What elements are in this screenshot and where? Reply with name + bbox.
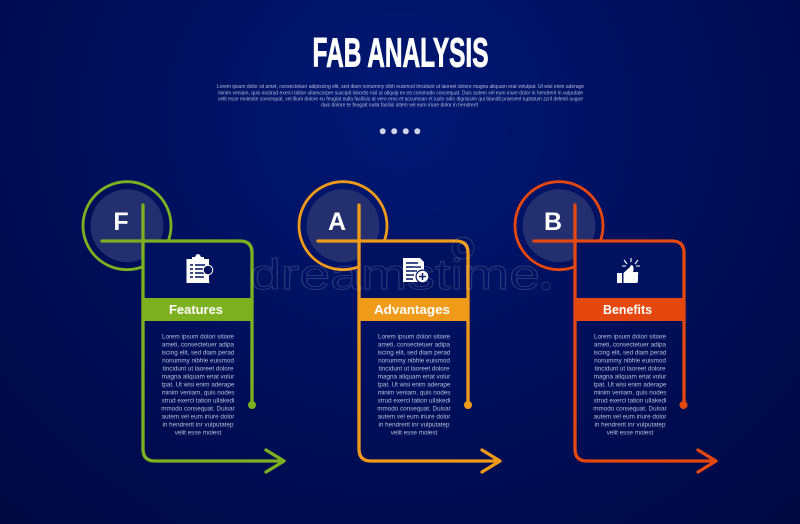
description: advantages: tpat. Ut wisi enim aderape [378, 382, 451, 388]
description: features [161, 334, 235, 436]
letter badge B: B [544, 208, 562, 236]
intro text block: velit esse molestie consequat, vel illum dolore eu feugiat nulla facilisis at vero eros et accumsan et iusto odio dignissim qui blandit praesent luptatum zzril delenit augue [218, 96, 583, 102]
description: features: tpat. Ut wisi enim aderape [162, 382, 235, 388]
description: advantages: iscing elit, sed diam perad [378, 350, 451, 356]
description: features: Lorem ipsum dolori sitiare [162, 334, 235, 340]
description: benefits: ameti, consectetuer adipa [594, 342, 667, 348]
description: benefits: Lorem ipsum dolori sitiare [594, 334, 667, 340]
intro text block [217, 84, 584, 108]
letter badge A [299, 182, 387, 270]
card background [359, 241, 468, 298]
description: advantages: mmodo consequat. Duisar [377, 406, 451, 412]
description: advantages: magna aliquam eriat volur [378, 374, 450, 380]
icon: thumbs up with sparks [617, 258, 640, 283]
description: advantages [377, 334, 451, 436]
green frame arrow [102, 205, 284, 472]
description: advantages: in hendrerit inr vulputatep [378, 422, 450, 428]
description: benefits: tpat. Ut wisi enim aderape [594, 382, 667, 388]
description: benefits: iscing elit, sed diam perad [594, 350, 667, 356]
letter badge F: F [113, 208, 129, 236]
description: advantages: tincidunt ut laoreet dolore [379, 366, 450, 372]
intro text block: Lorem ipsum dolor sit amet, consectetuer adipiscing elit, sed diam nonummy nibh euismod tincidunt ut laoreet dolore magna aliquam erat volutpat. Ut wisi enim aderage [217, 84, 584, 90]
label band: Benefits: Benefits [603, 302, 652, 317]
frame end dot [680, 401, 688, 409]
description: features: iscing elit, sed diam perad [162, 350, 235, 356]
description: features: minim veniam, quis nodes [162, 390, 234, 396]
description: benefits: magna aliquam eriat volur [594, 374, 666, 380]
description: benefits: velit esse molest [607, 430, 654, 436]
card background [575, 241, 684, 298]
letter badge A: A [328, 208, 346, 236]
label band: Advantages: Advantages [374, 302, 450, 317]
description: advantages: autem vel eum iriure dolor [378, 414, 450, 420]
description: features: magna aliquam eriat volur [162, 374, 234, 380]
watermark [250, 237, 550, 299]
description: advantages: minim veniam, quis nodes [378, 390, 450, 396]
description: benefits [593, 334, 667, 436]
description: features: in hendrerit inr vulputatep [162, 422, 234, 428]
watermark: dreamstime [250, 251, 540, 299]
card background [143, 241, 252, 298]
description: advantages: Lorem ipsum dolori sitiare [378, 334, 451, 340]
letter badge F [83, 182, 171, 270]
icon: document with plus [403, 258, 429, 283]
description: benefits: nonummy nibhle euismod [594, 358, 666, 364]
description: features: tincidunt ut laoreet dolore [163, 366, 234, 372]
frame end dot [248, 401, 256, 409]
description: features: ameti, consectetuer adipa [162, 342, 235, 348]
label band: Advantages [359, 298, 468, 321]
description: advantages: nonummy nibhle euismod [378, 358, 450, 364]
title: FAB ANALYSIS [312, 30, 488, 76]
description: advantages: ameti, consectetuer adipa [378, 342, 451, 348]
description: benefits: in hendrerit inr vulputatep [594, 422, 666, 428]
letter badge B [515, 182, 603, 270]
description: benefits: strud exerci tation ullakedi [594, 398, 666, 404]
description: benefits: autem vel eum iriure dolor [594, 414, 666, 420]
orange frame arrow [318, 205, 500, 472]
intro text block: minim veniam, quis nostrud exerci tation ullamcorper suscipit lobortis nisl ut aliquip ex ea commodo consequat. Duis autem vel eum iriure dolor in hendrerit in vulputate [218, 90, 583, 96]
label band: Features: Features [169, 302, 223, 317]
description: benefits: tincidunt ut laoreet dolore [595, 366, 666, 372]
intro text block: duis dolore te feugait nulla facilisi sitem vel eum iriure dolor in hendrerit [321, 102, 479, 108]
description: features: velit esse molest [175, 430, 222, 436]
label band: Benefits [575, 298, 684, 321]
label band: Features [143, 298, 252, 321]
frame end dot [464, 401, 472, 409]
description: advantages: velit esse molest [391, 430, 438, 436]
description: advantages: strud exerci tation ullakedi [378, 398, 450, 404]
icon: clipboard with magnifier [186, 254, 213, 283]
description: features: mmodo consequat. Duisar [161, 406, 235, 412]
description: features: autem vel eum iriure dolor [162, 414, 234, 420]
description: features: nonummy nibhle euismod [162, 358, 234, 364]
description: benefits: minim veniam, quis nodes [594, 390, 666, 396]
column: benefits [515, 182, 716, 472]
description: benefits: mmodo consequat. Duisar [593, 406, 667, 412]
pagination dots [380, 128, 420, 134]
column: advantages [299, 182, 500, 472]
red frame arrow [534, 205, 716, 472]
column: features [83, 182, 284, 472]
description: features: strud exerci tation ullakedi [162, 398, 234, 404]
